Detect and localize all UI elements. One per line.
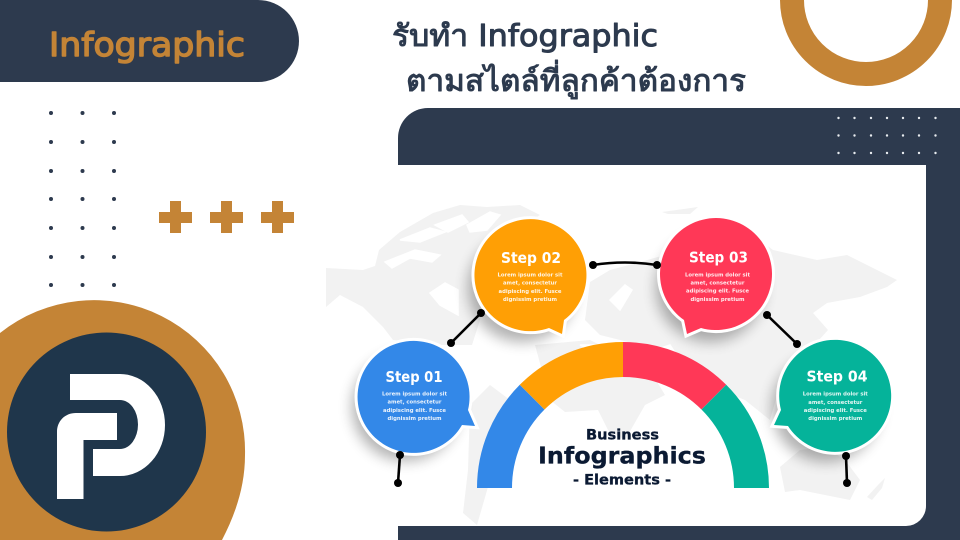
plus icons [159,201,294,233]
chart centre title: Infographics [538,442,706,470]
segment: orange [520,342,623,410]
dot grid on panel [837,117,937,154]
step 02 bubble: adipiscing elit. Fusce [498,289,562,295]
chart centre title [538,427,706,488]
step 04 bubble: dignissim pretium [808,416,862,422]
step 01 bubble: amet, consectetur [388,400,442,406]
step 04 bubble: adipiscing elit. Fusce [804,408,867,414]
step 02 bubble: dignissim pretium [503,297,557,303]
step 04 bubble [772,340,891,462]
step 04 bubble: Step 04 [806,368,868,386]
step 02 bubble: amet, consectetur [503,281,558,287]
step 01 bubble: dignissim pretium [388,416,442,422]
step 03 bubble: amet, consectetur [690,280,745,286]
chart centre title: - Elements - [573,472,671,488]
ring decoration top right [792,0,940,74]
step 02 bubble: Step 02 [501,249,561,267]
step 04 bubble: amet, consectetur [808,400,863,406]
map: inland seas and channels [384,212,675,352]
step 02 bubble: Lorem ipsum dolor sit [498,272,563,278]
dark back panel [398,108,960,540]
connector: step 4 tail [842,452,851,487]
step 01 bubble: Step 01 [386,368,442,386]
connector: step 2 to 3 [589,261,661,269]
world map [326,205,897,525]
segment: teal [702,385,769,488]
segment: red [623,342,726,410]
logo badge [0,300,245,540]
half-donut chart [477,342,769,488]
white infographic card [326,165,926,526]
step 03 bubble: adipiscing elit. Fusce [686,289,750,295]
page title: รับทำ Infographic [392,19,658,54]
connector: step 1 tail [394,451,404,487]
segment: blue [477,385,544,488]
chart centre title: Business [586,427,659,443]
connector: step 3 to 4 [763,311,801,348]
step 03 bubble: Lorem ipsum dolor sit [685,272,751,278]
page title [392,19,746,99]
header pill label: Infographic [49,25,245,64]
dot grid left [49,111,116,287]
step 03 bubble: dignissim pretium [690,297,744,303]
connector: step 1 to 2 [447,309,485,347]
step 01 bubble: Lorem ipsum dolor sit [382,391,448,397]
logo P mark [57,374,165,499]
step 02 bubble [468,219,586,342]
header pill [0,0,299,82]
step 04 bubble: Lorem ipsum dolor sit [803,392,868,398]
step 03 bubble [656,218,772,342]
step 03 bubble: Step 03 [689,249,748,267]
page title: ตามสไตล์ที่ลูกค้าต้องการ [406,60,746,99]
step 01 bubble [352,341,475,461]
step 01 bubble: adipiscing elit. Fusce [383,408,447,414]
